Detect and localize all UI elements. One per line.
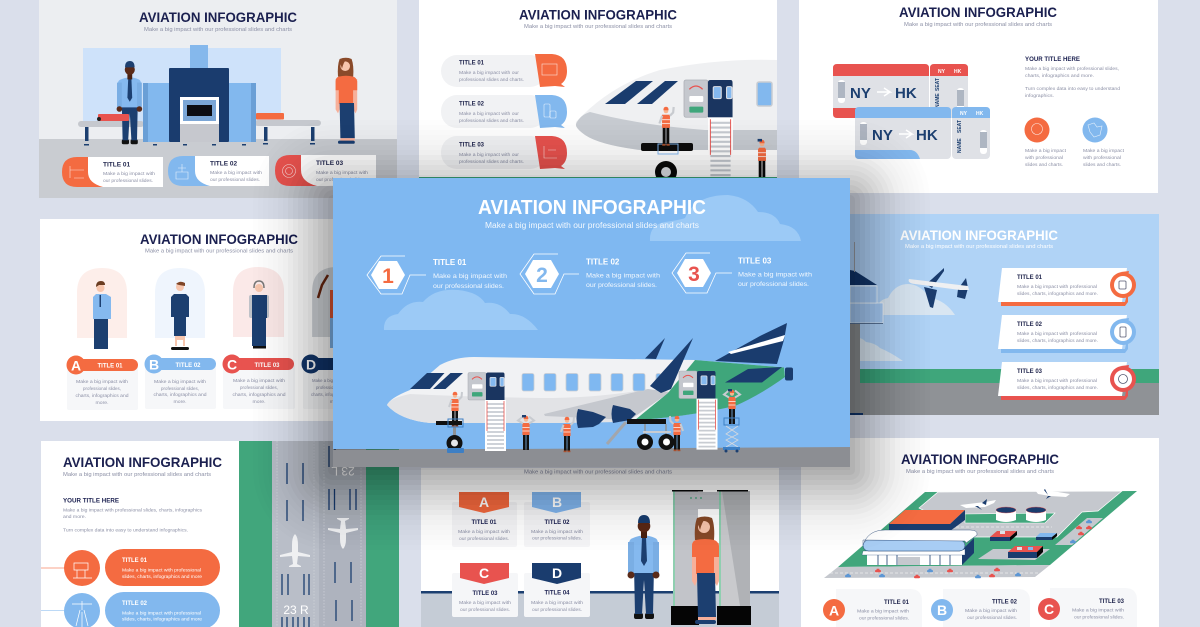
label: D title 04: more.	[330, 399, 341, 404]
boarding pass: blue ticket: HK	[916, 127, 938, 144]
text block: blue item: Make a big impact	[1083, 148, 1125, 153]
card: D	[524, 563, 590, 617]
card: title 02	[998, 315, 1136, 353]
illustration: flying airplane	[909, 268, 969, 308]
card: C: TITLE 03	[1099, 599, 1125, 605]
card: C: our professional slides.	[460, 607, 510, 612]
card: B: our professional slides.	[967, 615, 1017, 620]
text block: orange item: with professional	[1025, 155, 1063, 160]
front stairs	[485, 400, 506, 451]
label: A title 01	[66, 356, 138, 374]
panel: runway slide	[41, 441, 399, 627]
card: title 01	[998, 268, 1136, 306]
heading: hero: AVIATION INFOGRAPHIC	[478, 197, 706, 219]
card: title 01	[62, 157, 163, 187]
step 1: text: our professional slides.	[433, 283, 504, 290]
card: A: TITLE 01	[471, 520, 497, 526]
text block: C	[223, 364, 295, 409]
label: 23 R: 23 R	[283, 603, 309, 617]
text block: your title here: YOUR TITLE HERE	[1025, 56, 1080, 63]
card: C	[1038, 588, 1137, 627]
card: title 03	[998, 362, 1136, 400]
text block: your title here	[1025, 56, 1121, 98]
text block: your title here: infographics.	[1025, 93, 1054, 98]
card: D: Make a big impact with	[531, 600, 584, 605]
text block: C: charts, infographics and	[232, 392, 286, 397]
panel: flight crew slide	[40, 219, 352, 421]
card: A: Make a big impact with	[458, 529, 511, 534]
figure: pilot on arch	[77, 268, 127, 349]
pill: title 02: slides, charts, infographics and more	[122, 616, 203, 622]
card: D: TITLE 04	[544, 590, 570, 596]
label: D title 04	[302, 354, 352, 409]
panel: boarding pass slide	[799, 0, 1158, 193]
callout: title 01: TITLE 01	[459, 60, 485, 66]
step 1: text	[433, 258, 508, 290]
hangar	[889, 510, 965, 532]
heading: flight crew: AVIATION INFOGRAPHIC	[140, 231, 298, 247]
card: title 03: TITLE 03	[316, 160, 343, 167]
small airplanes	[960, 489, 1070, 510]
step 2: text: Make a big impact with	[586, 272, 661, 280]
text block: B	[145, 364, 216, 409]
label: D title 04: professional	[316, 385, 339, 390]
icon: runway circle	[41, 593, 100, 627]
tail fin	[715, 323, 787, 364]
front door	[468, 372, 504, 400]
text block: your title here: YOUR TITLE HERE	[63, 498, 119, 504]
boarding pass: red ticket: HK	[954, 69, 962, 75]
cockpit windows	[410, 373, 444, 389]
subtitle: flight crew: Make a big impact with our professional slides and charts	[145, 248, 293, 254]
illustration: airplane	[387, 323, 793, 453]
card: title 02: TITLE 02	[210, 160, 237, 168]
card: B	[931, 589, 1030, 627]
callout: title 03: professional slides and charts.	[459, 159, 524, 164]
fuselage	[387, 357, 785, 423]
step 1: text: TITLE 01	[433, 258, 467, 267]
heading: baggage screening: AVIATION INFOGRAPHIC	[139, 9, 297, 25]
label: C title 03: TITLE 03	[254, 363, 280, 369]
step 3: hexagon number	[672, 253, 732, 293]
icon: control tower circle	[41, 550, 100, 586]
illustration: runways	[272, 441, 366, 627]
callout: title 02: TITLE 02	[459, 102, 485, 108]
card: C	[452, 563, 518, 617]
text block: A: professional slides,	[83, 386, 121, 391]
figure: worker on scissor lift	[723, 389, 740, 452]
label: C title 03: C	[227, 356, 237, 372]
step 3: hexagon number: 3	[688, 263, 700, 286]
cloud: left	[384, 290, 538, 330]
callout: title 02: Make a big impact with our	[459, 111, 520, 116]
text block: B: professional slides,	[161, 386, 199, 391]
card: title 01: TITLE 01	[103, 162, 130, 168]
label: B title 02: B	[149, 356, 159, 372]
card: C: C	[479, 565, 489, 581]
boarding pass: blue ticket: HK	[976, 111, 984, 117]
illustration: airplane nose and stairs	[576, 60, 777, 183]
icon: airplane on runway 23 R	[280, 534, 310, 567]
card: C: our professional slides.	[1074, 614, 1124, 620]
soft shadow behind hero slide	[253, 120, 930, 550]
panel: airport map slide	[801, 438, 1159, 627]
step 1: hexagon number: 1	[382, 265, 394, 288]
card: title 03: our professional slides.	[316, 177, 366, 182]
card: B: our professional slides.	[532, 536, 582, 540]
text block: C: more.	[252, 399, 266, 404]
label: C title 03	[222, 354, 294, 374]
heading: boarding pass: AVIATION INFOGRAPHIC	[899, 4, 1057, 20]
heading: boarding: AVIATION INFOGRAPHIC	[519, 6, 677, 22]
card: C: C	[1044, 601, 1054, 617]
text block: your title here: Make a big impact with professional slides,	[1025, 66, 1119, 71]
card: A: A	[479, 494, 489, 510]
card: B: TITLE 02	[544, 520, 570, 526]
card: C: TITLE 03	[472, 591, 498, 597]
text block: A	[67, 365, 138, 410]
card: A: our professional slides.	[859, 616, 909, 620]
text block: C: Make a big impact with	[233, 378, 286, 383]
step 2: hexagon number: 2	[536, 264, 548, 287]
figure: ground crew marshal	[753, 139, 771, 177]
near wing	[650, 338, 693, 393]
subtitle: airport map: Make a big impact with our professional slides and charts	[906, 469, 1054, 475]
text block: blue item: with professional	[1083, 155, 1121, 160]
card: title 01: our professional slides.	[103, 178, 153, 183]
card: D: our professional slides.	[532, 607, 582, 612]
clouds	[850, 284, 955, 361]
illustration: walk-through metal detector	[671, 490, 751, 625]
card: title 03	[275, 155, 376, 186]
subtitle: control tower: Make a big impact with our professional slides and charts	[905, 244, 1053, 250]
callout: title 03: Make a big impact with our	[459, 152, 520, 157]
figure: passenger	[336, 58, 357, 144]
step 1: hexagon number	[367, 256, 426, 294]
pill: title 01: TITLE 01	[122, 558, 148, 564]
boarding pass: blue ticket: NAME	[957, 138, 963, 153]
icon: orange globe pin	[1024, 118, 1050, 142]
card: title 03: Make a big impact with	[316, 170, 369, 175]
boarding pass: red ticket: HK	[895, 85, 917, 102]
figure: security guard	[628, 515, 660, 619]
card: B: TITLE 02	[992, 600, 1018, 606]
text block: B: Make a big impact with	[154, 379, 207, 384]
text block: A: charts, infographics and	[76, 393, 129, 398]
heading: control tower: AVIATION INFOGRAPHIC	[900, 227, 1058, 243]
terminal	[862, 530, 977, 565]
callout: title 03	[441, 136, 567, 169]
subtitle: runway: Make a big impact with our professional slides and charts	[63, 472, 211, 478]
label: B title 02	[144, 354, 216, 374]
pill: title 02: Make a big impact with professional	[122, 610, 201, 616]
illustration: control tower	[850, 242, 883, 415]
card: title 01: TITLE 01	[1017, 275, 1043, 281]
figure: security guard	[117, 61, 142, 144]
figure: worker at rear gear	[670, 416, 683, 451]
step 2: text: our professional slides.	[586, 282, 657, 289]
boarding pass: blue ticket: NY	[960, 111, 968, 117]
panel: central hero slide	[333, 178, 850, 467]
card: title 03: TITLE 03	[1017, 369, 1043, 375]
subtitle: boarding: Make a big impact with our professional slides and charts	[524, 24, 672, 30]
card: title 03: Make a big impact with professional	[1017, 378, 1097, 383]
panel: baggage screening slide	[39, 0, 397, 198]
callout: title 03: TITLE 03	[459, 142, 485, 148]
engines	[576, 405, 636, 428]
main landing gear	[627, 419, 674, 450]
step 2: text: TITLE 02	[586, 258, 620, 266]
boarding pass: red ticket: NY	[938, 69, 946, 75]
heading: airport map: AVIATION INFOGRAPHIC	[901, 451, 1059, 467]
illustration: red suitcase	[97, 114, 129, 121]
boarding pass: blue ticket: SEAT	[957, 120, 963, 133]
rear stairs	[696, 399, 718, 450]
boarding pass: red ticket	[833, 64, 968, 118]
step 3: text: TITLE 03	[738, 256, 772, 266]
card: title 02: Make a big impact with professional	[1017, 331, 1097, 336]
card: title 02: slides, charts, infographics and more.	[1017, 338, 1098, 343]
label: D title 04: D	[306, 356, 316, 372]
boarding pass: red ticket: NAME	[935, 93, 941, 108]
icon: airplane on runway 23 L	[328, 518, 358, 549]
callout: title 01	[441, 54, 567, 87]
cabin windows	[522, 374, 661, 391]
figure: ground engineer on arch	[233, 267, 284, 348]
panel: airplane boarding slide	[419, 0, 777, 183]
figure: ground crew on lift	[659, 107, 674, 146]
label: A title 01: TITLE 01	[97, 364, 123, 370]
callout: title 01: professional slides and charts.	[459, 77, 524, 82]
text block: your title here: Turn complex data into easy to understand infographics.	[63, 528, 188, 532]
text block: your title here: and more.	[63, 514, 86, 519]
illustration: isometric airport	[824, 489, 1137, 578]
pill: title 01	[105, 549, 220, 586]
text block: your title here	[63, 498, 203, 532]
card: A: TITLE 01	[884, 600, 910, 606]
card: title 01: Make a big impact with	[103, 171, 156, 176]
text block: blue item: slides and charts.	[1083, 162, 1121, 167]
cars	[845, 520, 1092, 578]
step 3: text: our professional slides.	[738, 281, 809, 288]
label: 23 L: 23 L	[331, 464, 355, 478]
figure: worker on nose lift	[448, 392, 463, 427]
text block: orange item: Make a big impact	[1025, 148, 1067, 153]
panel: control tower slide	[850, 214, 1159, 415]
card: title 02: Make a big impact with	[210, 170, 263, 175]
nose landing gear	[436, 421, 464, 453]
card: A	[452, 492, 517, 547]
cloud: upper right	[650, 195, 801, 241]
pill: title 01: Make a big impact with professional	[122, 568, 201, 572]
card: title 03: slides, charts, infographics and more.	[1017, 385, 1098, 390]
rear door	[679, 371, 716, 398]
callout: title 01: Make a big impact with our	[459, 70, 520, 75]
subtitle: boarding pass: Make a big impact with our professional slides and charts	[904, 22, 1052, 28]
card: title 02	[168, 156, 269, 186]
figure: worker at engine	[561, 417, 574, 452]
tanks	[996, 507, 1046, 522]
figure: worker under fuselage	[518, 415, 534, 450]
boarding pass: blue ticket: NY	[872, 127, 893, 144]
boarding pass: red ticket: SEAT	[935, 78, 941, 91]
step 2: text	[586, 258, 661, 289]
text block: your title here: Make a big impact with professional slides, charts, infographics	[63, 508, 203, 512]
card: D: D	[552, 565, 562, 581]
boarding pass: red ticket: NY	[850, 85, 871, 102]
text block: your title here: charts, infographics and more.	[1025, 73, 1094, 78]
pill: title 02	[105, 592, 220, 627]
panel: security gate slide	[421, 468, 779, 627]
card: title 02: TITLE 02	[1017, 322, 1043, 328]
heading: runway: AVIATION INFOGRAPHIC	[63, 454, 222, 470]
card: C: Make a big impact with	[459, 600, 512, 605]
label: A title 01: A	[71, 358, 81, 374]
figure: passenger	[692, 516, 719, 624]
label: D title 04: Make a big	[312, 378, 334, 383]
subtitle: hero: Make a big impact with our professional slides and charts	[485, 221, 699, 230]
text block: blue item	[1083, 148, 1125, 167]
text block: orange item	[1025, 148, 1067, 167]
step 3: text	[738, 256, 813, 288]
card: title 01: Make a big impact with professional	[1017, 284, 1097, 289]
text block: orange item: slides and charts.	[1025, 162, 1063, 167]
card: B: Make a big impact with	[531, 529, 584, 534]
card: title 01: slides, charts, infographics and more.	[1017, 291, 1098, 296]
text block: B: charts, infographics and	[154, 392, 207, 397]
step 3: text: Make a big impact with	[738, 272, 813, 278]
card: B	[524, 492, 590, 547]
green rear section	[635, 360, 785, 420]
card: A: Make a big impact with	[857, 608, 910, 614]
text block: A: more.	[96, 400, 108, 405]
figure: marshaller on arch	[312, 267, 345, 348]
pill: title 01: slides, charts, infographics and more	[122, 574, 203, 579]
callout: title 02: professional slides and charts.	[459, 118, 524, 123]
card: B: B	[937, 602, 947, 618]
card: A: A	[829, 602, 839, 618]
card: A: our professional slides.	[459, 536, 509, 541]
step 2: hexagon number	[520, 254, 579, 294]
card: C: Make a big impact with	[1072, 608, 1125, 612]
card: B: Make a big impact with	[965, 608, 1018, 613]
text block: C: professional slides,	[240, 385, 278, 390]
card: B: B	[552, 494, 562, 510]
illustration: x-ray baggage scanner	[78, 45, 321, 146]
ramp	[607, 422, 626, 444]
subtitle: baggage screening: Make a big impact with our professional slides and charts	[144, 27, 292, 33]
subtitle: security gate: Make a big impact with our professional slides and charts	[524, 470, 672, 476]
card: A	[823, 589, 922, 627]
figure: flight attendant on arch	[155, 268, 205, 350]
card: title 02: our professional slides.	[210, 177, 260, 182]
text block: A: Make a big impact with	[76, 379, 129, 384]
text block: B: more.	[174, 399, 186, 404]
icon: blue world map	[1082, 118, 1108, 142]
service buildings	[990, 531, 1057, 558]
step 1: text: Make a big impact with	[433, 273, 508, 280]
text block: your title here: Turn complex data into easy to understand	[1025, 86, 1121, 91]
label: D title 04: charts, infog	[311, 392, 335, 397]
boarding pass: blue ticket	[855, 107, 990, 159]
pill: title 02: TITLE 02	[122, 601, 148, 607]
label: B title 02: TITLE 02	[175, 363, 201, 369]
callout: title 02	[441, 95, 567, 128]
